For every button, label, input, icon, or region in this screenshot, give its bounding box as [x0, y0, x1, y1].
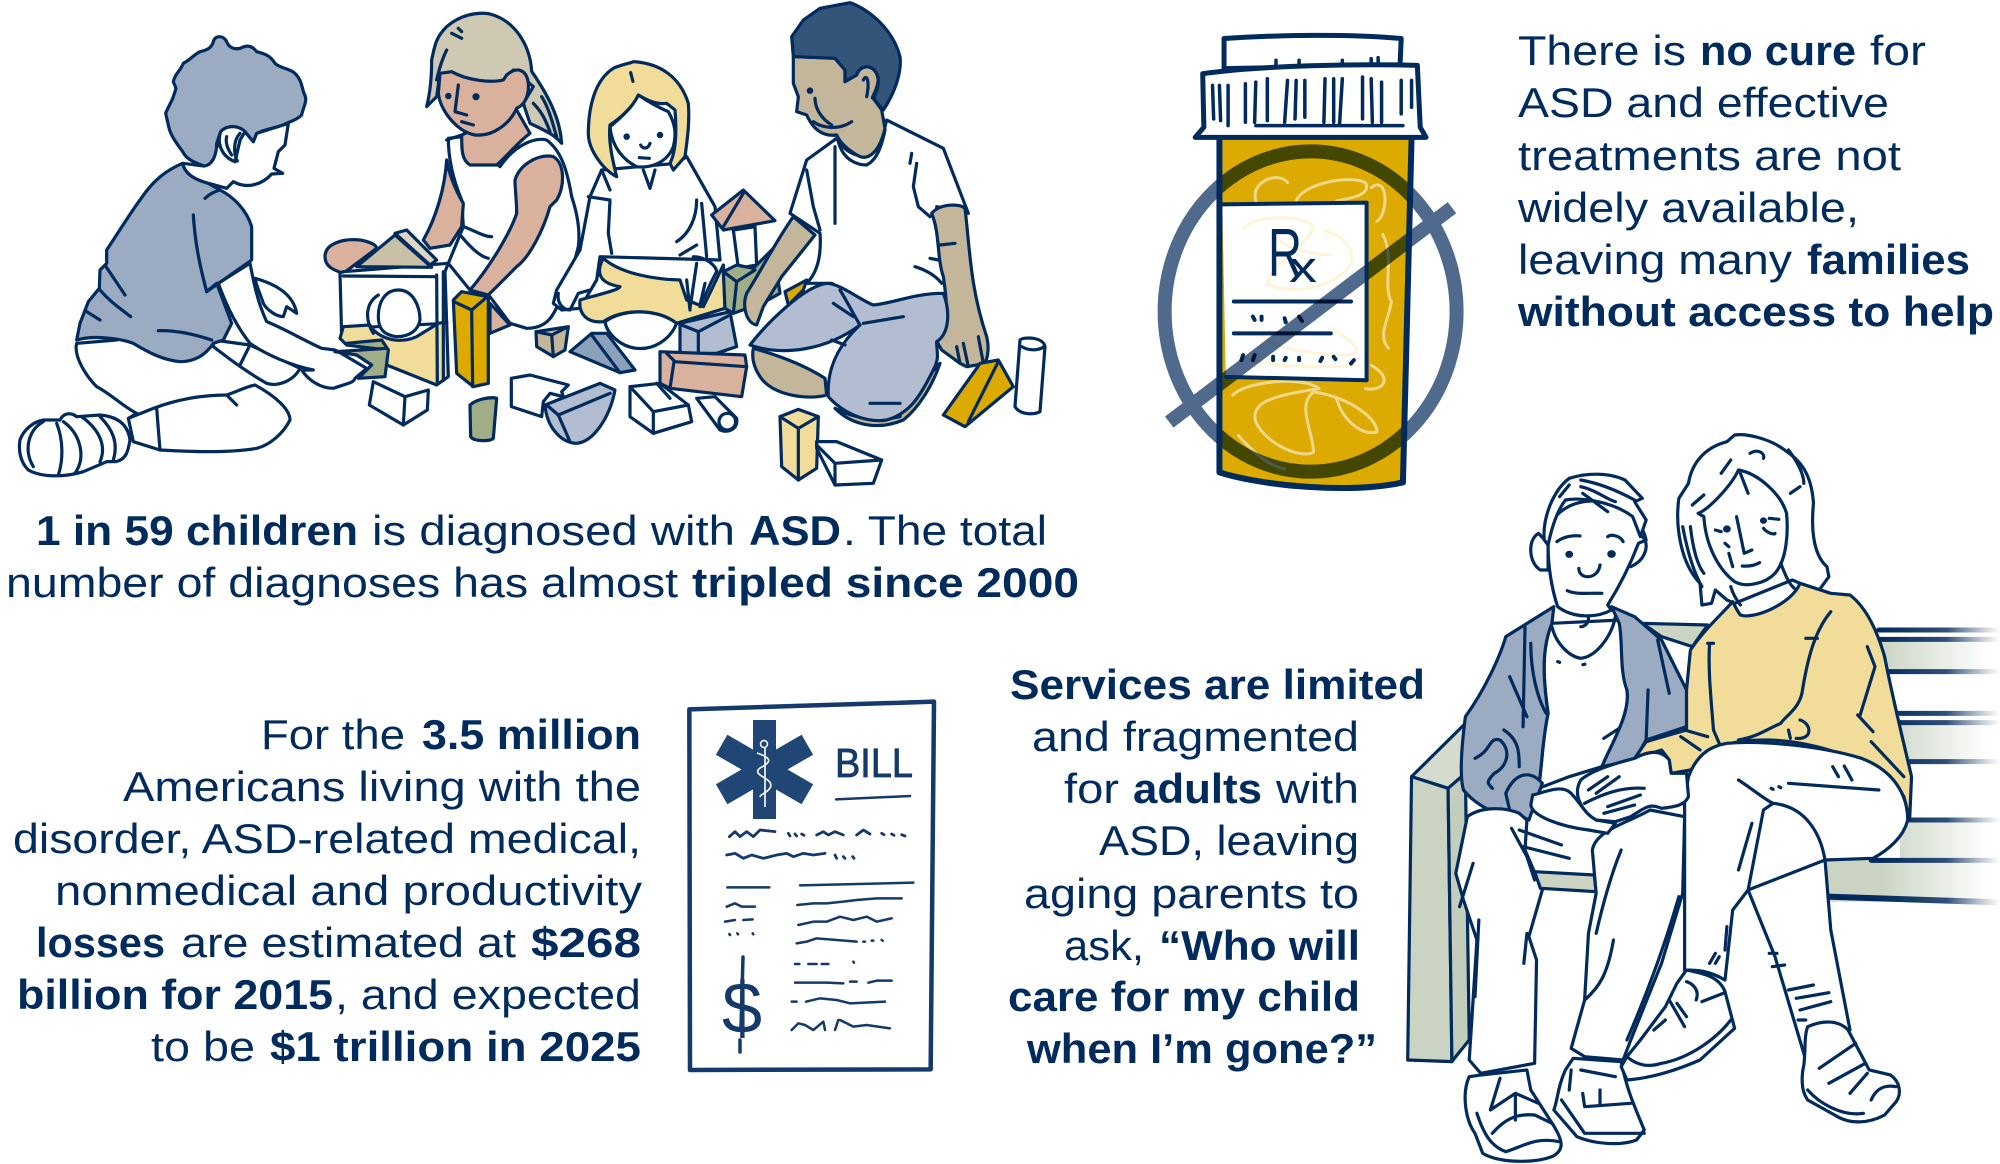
caption: adult services: [1008, 661, 1425, 1072]
caption: adult services: ASD, leaving: [1099, 817, 1359, 864]
bottle cap: [1195, 35, 1426, 137]
BILL text: BILL: [835, 740, 913, 786]
caption: economic cost: $268: [531, 919, 641, 966]
caption: economic cost: nonmedical and productivity: [55, 867, 642, 914]
caption: no cure: families: [1807, 236, 1970, 283]
Rx symbol: R: [1268, 215, 1302, 291]
caption: economic cost: For the: [261, 711, 405, 758]
caption: children diagnosis: tripled since 2000: [692, 559, 1079, 606]
caption: no cure: widely available,: [1517, 184, 1859, 231]
caption: economic cost: , and expected: [335, 971, 641, 1018]
label: [1222, 203, 1367, 380]
block castle: [340, 230, 497, 441]
caption: adult services: with: [1275, 765, 1359, 812]
caption: children diagnosis: . The total: [843, 507, 1047, 554]
child 3 with blonde hair: [553, 62, 725, 349]
caption: no cure: ASD and effective: [1518, 79, 1889, 126]
illustration: parent and adult son on bench: [1408, 435, 2000, 1161]
label lines: [1234, 302, 1354, 363]
pills: [1233, 178, 1391, 469]
caption: adult services: adults: [1133, 765, 1262, 812]
caption: adult services: aging parents to: [1024, 870, 1359, 917]
caption: economic cost: losses: [36, 919, 165, 966]
caption: children diagnosis: [6, 507, 1079, 606]
illustration: children playing with blocks, left half: [19, 13, 579, 476]
caption: children diagnosis: number of diagnoses has almost: [6, 559, 678, 606]
caption: economic cost: to be: [151, 1023, 255, 1070]
child 2 with beige hair: [325, 13, 579, 333]
bottle outline: [1219, 137, 1412, 488]
caption: adult services: Services are limited: [1010, 661, 1425, 708]
bottle body: [1219, 137, 1412, 488]
child 4 with white shirt: [745, 3, 988, 426]
prohibition ring: [1165, 151, 1457, 472]
caption: adult services: care for my child: [1008, 973, 1360, 1020]
bench: [1408, 623, 2000, 1062]
illustration: medical bill: [689, 702, 934, 1070]
caption: adult services: for: [1064, 765, 1119, 812]
caption: no cure: no cure: [1700, 27, 1856, 74]
illustration: prescription bottle crossed out: [1165, 35, 1457, 488]
caption: adult services: and fragmented: [1032, 713, 1359, 760]
caption: economic cost: Americans living with the: [123, 763, 641, 810]
caption: economic cost: billion for 2015: [17, 971, 333, 1018]
caption: no cure: [1517, 27, 1994, 335]
caption: economic cost: 3.5 million: [422, 711, 641, 758]
caption: no cure: for: [1870, 27, 1926, 74]
illustration: children playing with blocks, right half: [511, 3, 1045, 485]
child 1 with blue shirt: [19, 37, 388, 476]
caption: no cure: without access to help: [1517, 288, 1994, 335]
caption: no cure: leaving many: [1518, 236, 1792, 283]
caption: no cure: treatments are not: [1518, 132, 1901, 179]
caption: children diagnosis: is diagnosed with: [372, 507, 735, 554]
caption: economic cost: [13, 711, 642, 1070]
toy blocks: [511, 312, 1045, 485]
caption: no cure: There is: [1518, 27, 1686, 74]
dollar sign: $: [722, 969, 762, 1049]
caption: children diagnosis: 1 in 59 children: [36, 507, 358, 554]
paper and scribbles: [689, 702, 934, 1070]
joined hands: [1531, 752, 1688, 833]
son: [1456, 474, 1687, 1161]
caption: adult services: ask,: [1064, 922, 1144, 969]
mother: [1621, 435, 1912, 1122]
caption: economic cost: are estimated at: [181, 919, 516, 966]
caption: adult services: “Who will: [1159, 922, 1360, 969]
caption: adult services: when I’m gone?”: [1026, 1025, 1377, 1072]
caption: economic cost: $1 trillion in 2025: [270, 1023, 641, 1070]
caption: children diagnosis: ASD: [749, 507, 841, 554]
blocks behind child 4: [712, 190, 807, 313]
Rx symbol: x: [1289, 243, 1317, 292]
star of life: [716, 720, 813, 819]
caption: economic cost: disorder, ASD-related medical,: [13, 815, 641, 862]
